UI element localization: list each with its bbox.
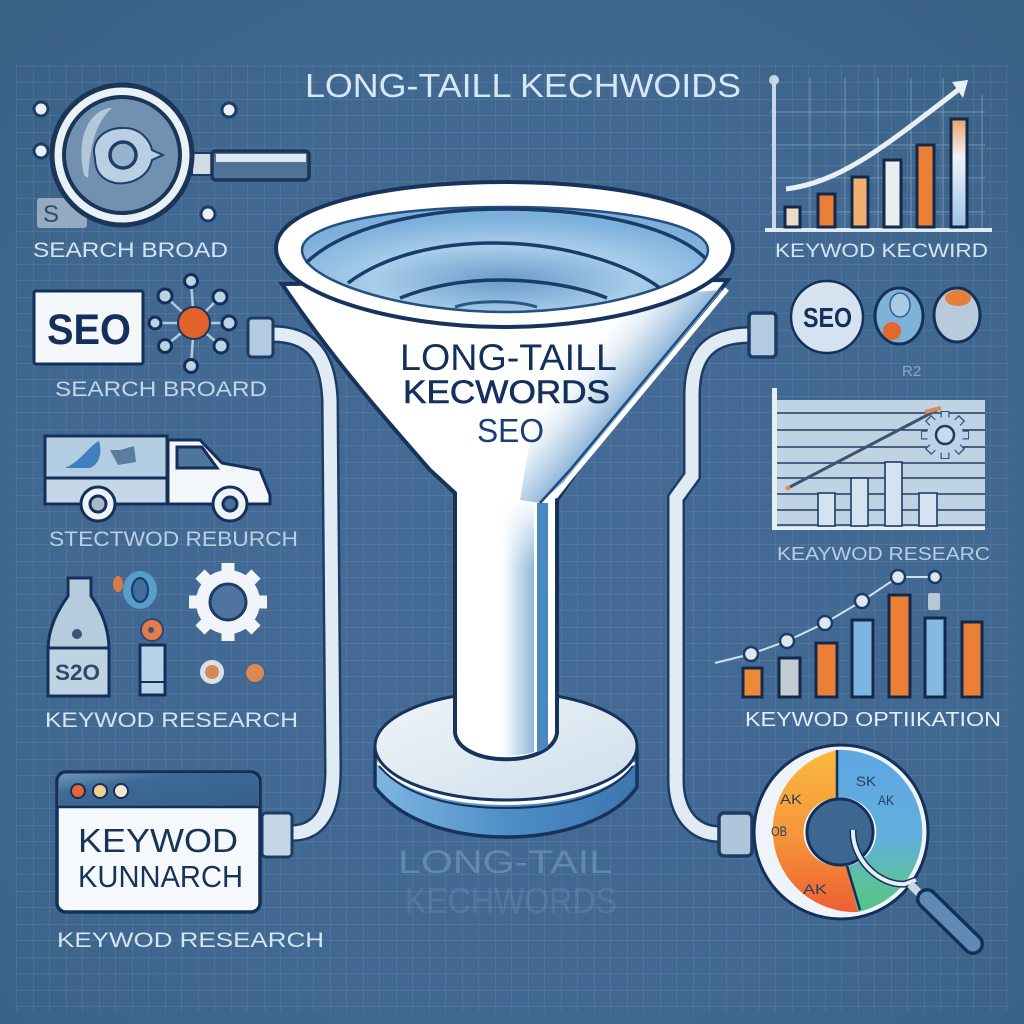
trend line [786,408,941,490]
label: KEYWOD OPTIIKATION [745,709,1001,731]
SEO disc [791,281,863,353]
panel: SEO circles [791,281,980,380]
label: SEARCH BROARD [55,378,267,401]
panel: research chart [772,388,990,564]
icon: gear [189,563,267,641]
icon: small discs [200,660,265,684]
bars [743,595,982,697]
icon: bottle: S2O [55,660,100,685]
blue-orange badge [875,288,923,344]
panel: growth bar chart [765,75,992,262]
label: KEYWOD KECWIRD [775,241,988,262]
donut labels: AK [780,791,803,807]
label: KEAYWOD RESEARC [777,544,990,564]
ghost text under funnel: LONG-TAIL [398,844,612,880]
ghost text under funnel: KECHWORDS [405,880,617,921]
SEO badge: SEO [47,306,131,354]
funnel [276,182,733,837]
funnel bowl [302,207,708,312]
panel: donut chart with magnifier [754,745,973,944]
icon: hub and nodes [149,274,236,372]
bars [785,119,967,227]
right connector pipe [676,313,776,856]
icon: search box [37,198,87,228]
panel: bottle and gear [45,563,298,732]
donut labels: AK [803,881,828,897]
icon: magnifier [52,85,309,225]
donut labels: SK [856,773,877,789]
funnel label [400,337,617,449]
left connector pipe [248,318,333,857]
browser text: KUNNARCH [78,859,243,894]
label: STECTWOD REBURCH [49,528,298,551]
panel: browser window [57,772,324,952]
donut [754,745,928,919]
icon: truck [45,436,270,521]
panel: SEO network [34,274,267,401]
chart axes [765,75,992,232]
icon: search box: S [43,201,59,228]
donut labels [771,773,895,897]
funnel label: SEO [477,412,544,449]
browser text [78,822,243,894]
grey-orange badge [934,288,980,342]
icon: blue ring [113,571,157,609]
cone shading [520,287,727,503]
icon: gear [921,411,969,459]
label: KEYWOD RESEARCH [45,709,298,732]
ghost text under funnel [398,844,617,921]
faint label: R2 [902,363,921,380]
funnel cone and stem [282,280,728,759]
title: LONG-TAILL KECHWOIDS [305,67,741,104]
browser text: KEYWOD [78,822,238,859]
browser frame [57,772,260,912]
icon: orbit dots [34,102,236,221]
donut labels: OB [771,823,787,839]
label: SEARCH BROAD [33,239,228,262]
label: KEYWOD RESEARCH [57,929,324,952]
funnel label: LONG-TAILL [400,337,617,378]
stem shading [498,498,548,756]
panel: delivery truck [45,436,298,551]
arrow [786,80,968,189]
panel: magnifying glass search broad [33,85,309,262]
funnel rim [276,182,733,327]
icon: magnifier [853,830,973,944]
chart grid [770,78,985,228]
donut labels: AK [878,792,895,808]
panel: optimization bar chart [715,570,1001,731]
SEO badge [34,291,143,364]
icon: orange ring on cylinder [140,619,165,695]
funnel base [375,692,637,837]
trend line [715,570,941,663]
icon: bottle [48,578,109,696]
SEO disc: SEO [803,302,852,333]
funnel label: KECWORDS [403,374,610,410]
chart plot [772,388,985,530]
